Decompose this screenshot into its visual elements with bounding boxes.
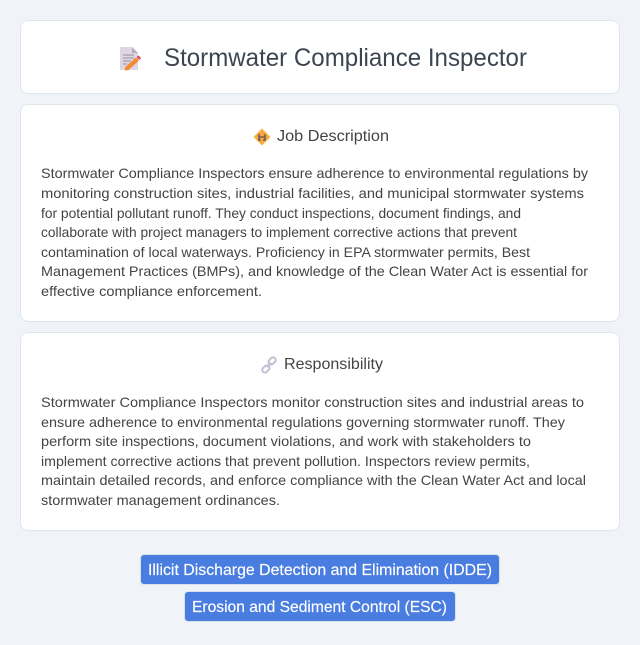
tag: ESC [184,591,456,622]
text: responsibility body: maintain detailed records, and enforce compliance with the Clean Water Act and local [41,472,586,488]
text: responsibility body: ensure adherence to environmental regulations governing stormwater runoff. They [41,414,565,430]
text: job description body [41,165,588,299]
text: responsibility body [41,394,586,508]
tag: IDDE [140,554,500,585]
text: job description body: contamination of local waterways. Proficiency in EPA stormwater permits, Best [41,244,530,260]
text: job description body: for potential pollutant runoff. They conduct inspections, document findings, and [41,205,521,221]
tag: ESC: Erosion and Sediment Control (ESC) [192,599,447,616]
panel: job description [20,104,620,322]
text: responsibility body: perform site inspections, document violations, and work with stakeholders to [41,433,531,449]
text: job description body: Management Practices (BMPs), and knowledge of the Clean Water Act is essential for [41,263,588,279]
text: responsibility body: stormwater management ordinances. [41,492,280,508]
tag: IDDE: Illicit Discharge Detection and Elimination (IDDE) [148,562,492,579]
icon: memo with pencil [120,47,141,70]
text: job description body: monitoring construction sites, industrial facilities, and municipal stormwater systems [41,185,584,201]
heading: title: Stormwater Compliance Inspector [164,44,527,72]
heading: job description: Job Description [277,128,389,145]
text: job description body: effective compliance enforcement. [41,283,262,299]
text: job description body: Stormwater Compliance Inspectors ensure adherence to environmental regulations by [41,165,588,181]
text: responsibility body: implement corrective actions that prevent pollution. Inspectors review permits, [41,453,530,469]
icon: construction diamond [254,128,270,146]
text: responsibility body: Stormwater Compliance Inspectors monitor construction sites and industrial areas to [41,394,584,410]
heading: responsibility: Responsibility [284,356,383,373]
panel: responsibility [20,332,620,531]
icon: link [261,356,277,374]
text: job description body: collaborate with project managers to implement corrective actions that prevent [41,224,517,240]
panel: title [20,20,620,94]
